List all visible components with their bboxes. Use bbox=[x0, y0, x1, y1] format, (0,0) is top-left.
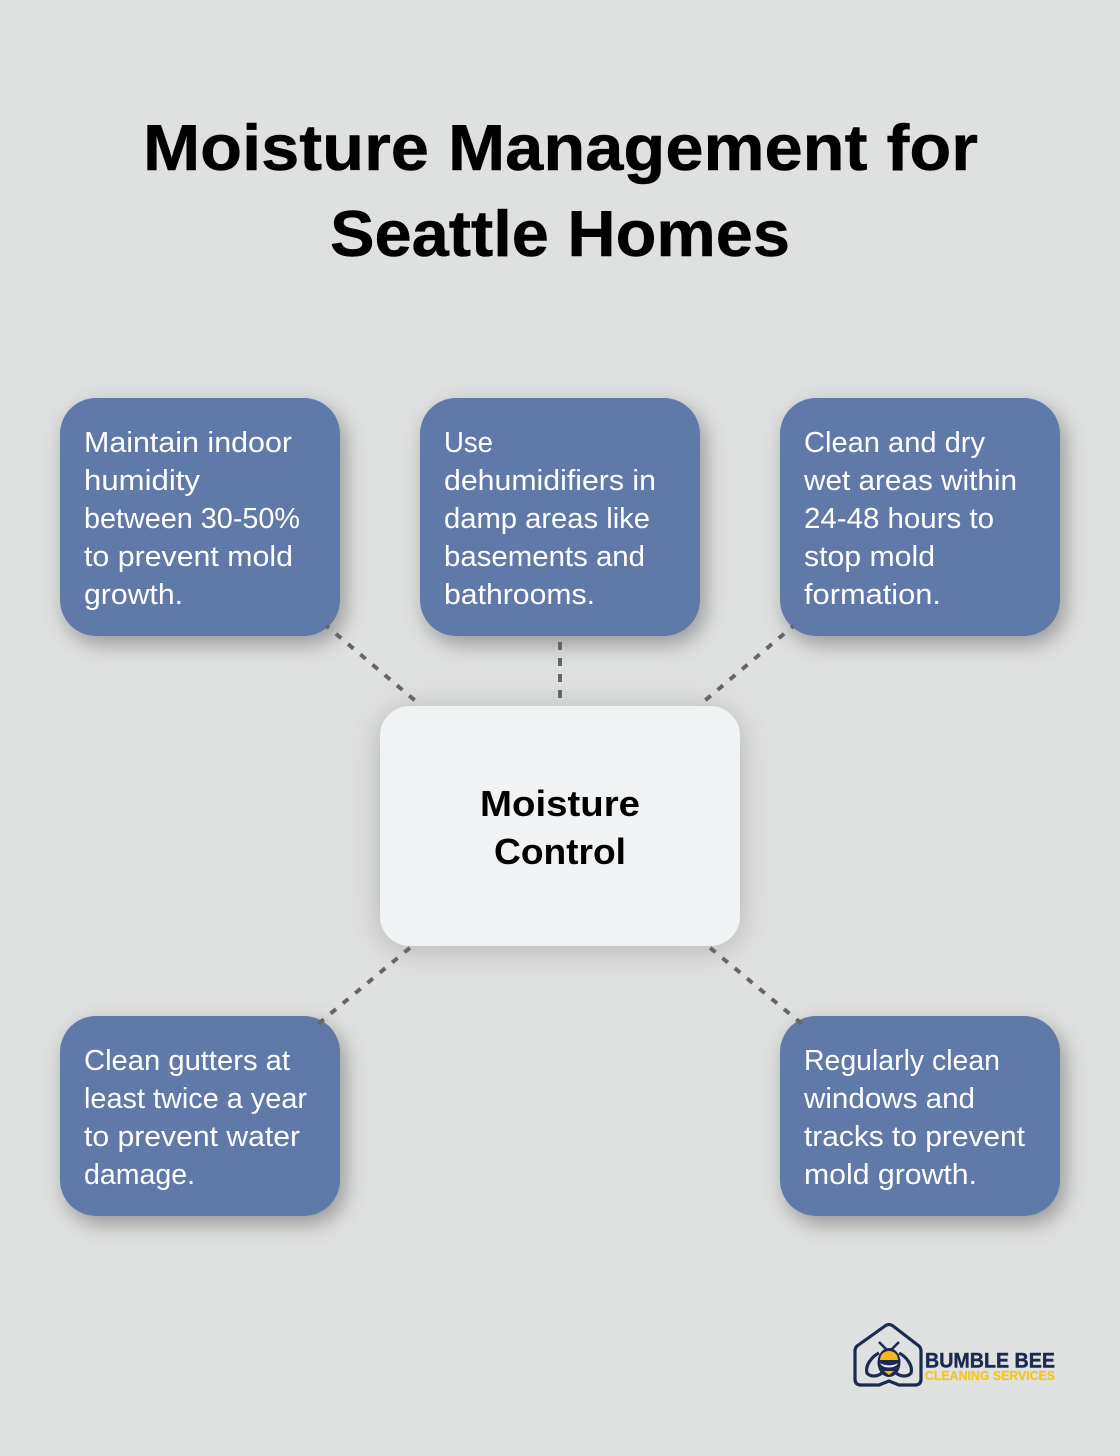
card text: dehumidifiers in bbox=[444, 465, 656, 497]
panel: regularly clean windows bbox=[780, 1016, 1060, 1216]
center card text bbox=[480, 783, 640, 872]
logo wordmark: BUMBLE BEE bbox=[925, 1348, 1055, 1372]
card text: wet areas within bbox=[803, 465, 1017, 497]
card text: damage. bbox=[84, 1159, 195, 1191]
card background bbox=[780, 398, 1060, 636]
logo: Bumble Bee Cleaning Services bbox=[855, 1324, 1055, 1385]
card text: Regularly clean bbox=[804, 1045, 1000, 1077]
card text: 24-48 hours to bbox=[804, 503, 994, 535]
card text bbox=[444, 427, 656, 611]
card background bbox=[60, 1016, 340, 1216]
card text: bathrooms. bbox=[444, 579, 595, 611]
panel: clean gutters bbox=[60, 1016, 340, 1216]
card text: growth. bbox=[84, 579, 183, 611]
card background bbox=[780, 1016, 1060, 1216]
dashed connectors bbox=[318, 626, 802, 1024]
card text: Use bbox=[444, 427, 493, 459]
card text: Clean and dry bbox=[804, 427, 986, 459]
card text: tracks to prevent bbox=[804, 1121, 1025, 1153]
center card background bbox=[380, 706, 740, 946]
title: Seattle Homes bbox=[330, 197, 790, 270]
card text bbox=[803, 427, 1017, 611]
card text: mold growth. bbox=[804, 1159, 977, 1191]
card text: to prevent mold bbox=[84, 541, 293, 573]
card text: formation. bbox=[804, 579, 941, 611]
center card text: Control bbox=[494, 831, 626, 872]
panel: use dehumidifiers bbox=[420, 398, 700, 636]
card text bbox=[84, 1045, 308, 1191]
card text: basements and bbox=[444, 541, 645, 573]
title: Moisture Management for bbox=[143, 111, 978, 184]
card text: windows and bbox=[803, 1083, 975, 1115]
card text bbox=[84, 427, 300, 611]
panel: clean and dry wet areas bbox=[780, 398, 1060, 636]
card text: humidity bbox=[84, 465, 201, 497]
panel: maintain indoor humidity bbox=[60, 398, 340, 636]
panel: central moisture control bbox=[380, 706, 740, 946]
card text: damp areas like bbox=[444, 503, 650, 535]
card text: to prevent water bbox=[84, 1121, 301, 1153]
card background bbox=[420, 398, 700, 636]
card text: stop mold bbox=[804, 541, 935, 573]
connector: bottom left bbox=[318, 948, 410, 1024]
card text bbox=[803, 1045, 1025, 1191]
center card text: Moisture bbox=[480, 783, 640, 824]
card text: Maintain indoor bbox=[84, 427, 293, 459]
card background bbox=[60, 398, 340, 636]
connector: top left bbox=[326, 626, 422, 706]
card text: between 30-50% bbox=[84, 503, 300, 535]
connector: bottom right bbox=[710, 948, 802, 1024]
card text: least twice a year bbox=[84, 1083, 308, 1115]
title bbox=[143, 111, 978, 270]
logo tagline: CLEANING SERVICES bbox=[925, 1369, 1055, 1383]
connector: top right bbox=[698, 626, 794, 706]
icon: house with bee bbox=[855, 1324, 921, 1385]
card text: Clean gutters at bbox=[84, 1045, 290, 1077]
connector: top center bbox=[558, 642, 562, 698]
